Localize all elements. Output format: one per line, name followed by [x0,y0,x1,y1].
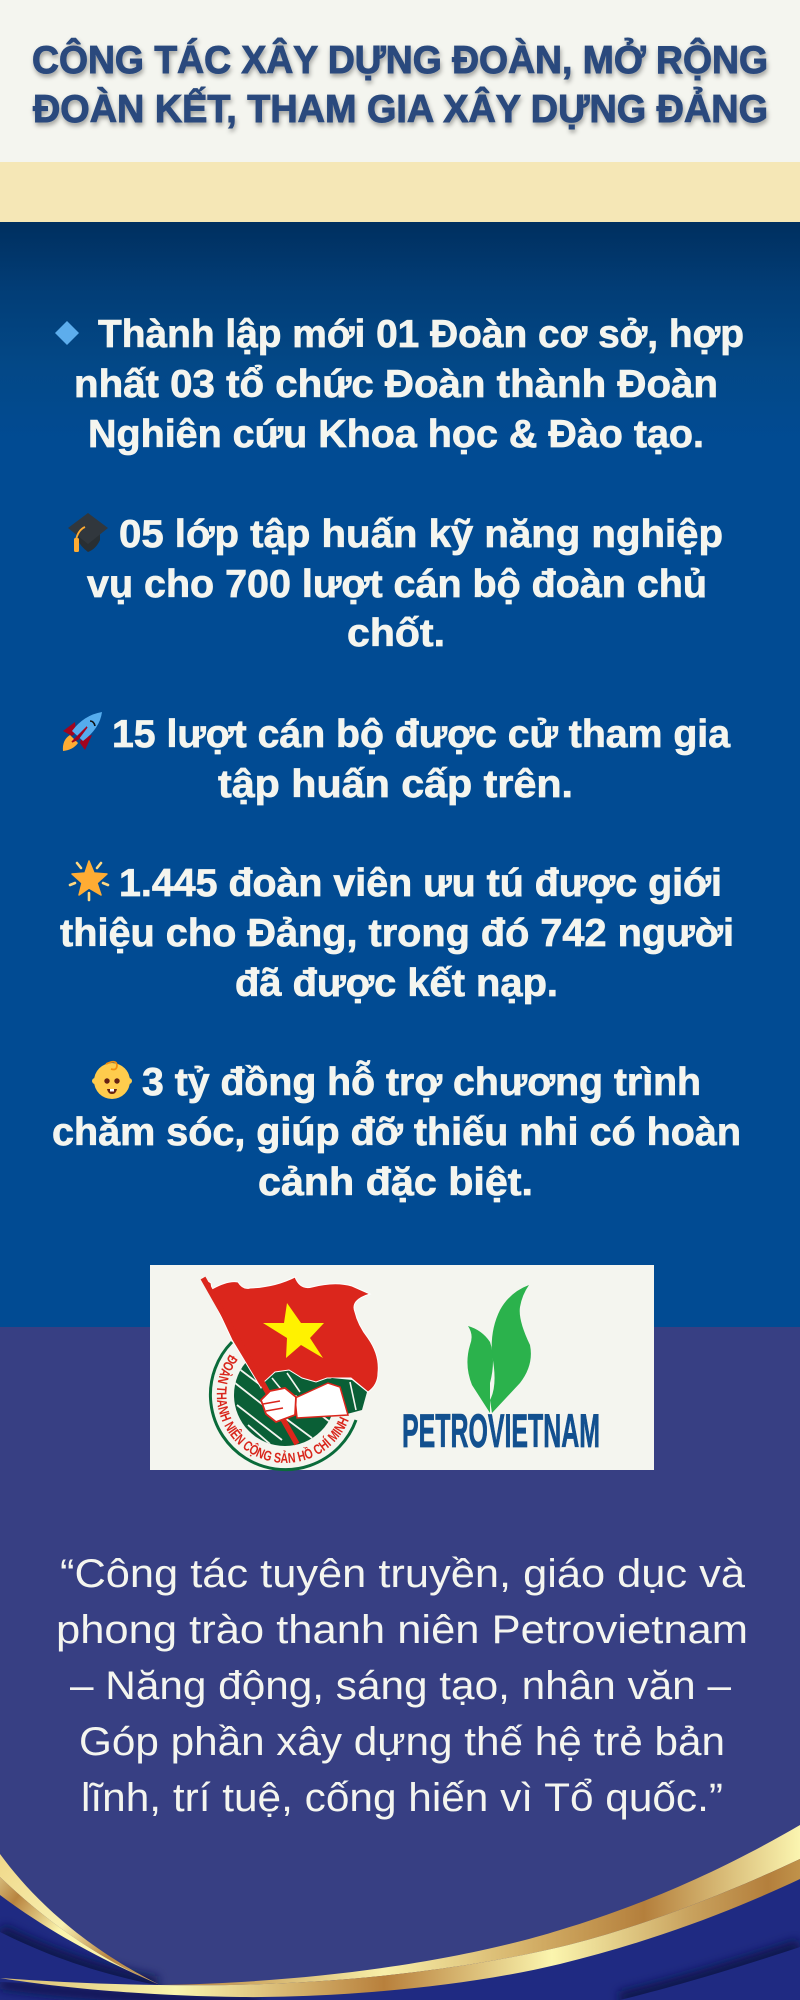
text block: new organisations: nhất 03 tổ chức Đoàn thành Đoàn [74,363,718,406]
text block: officers sent for training [63,712,731,806]
text block: new organisations [55,313,744,456]
icon: rocket [63,712,102,751]
panel: logo card [150,1265,654,1472]
text block: outstanding members [60,861,734,1005]
title: CÔNG TÁC XÂY DỰNG ĐOÀN, MỞ RỘNG [32,37,768,82]
text block: closing quote: Góp phần xây dựng thế hệ trẻ bản [79,1720,725,1764]
panel: header background [0,0,800,162]
text block: training classes: chốt. [347,612,445,655]
text block: support for children: 3 tỷ đồng hỗ trợ chương trình [142,1060,701,1104]
text block: outstanding members: đã được kết nạp. [235,962,558,1005]
icon: Ho Chi Minh Youth Union badge [200,1276,379,1472]
panel: blue achievements background [0,222,800,1327]
title: ĐOÀN KẾT, THAM GIA XÂY DỰNG ĐẢNG [33,87,768,131]
text block: training classes: vụ cho 700 lượt cán bộ đoàn chủ [87,563,707,606]
icon: Petrovietnam leaves [467,1285,531,1413]
icon: star on flag [263,1303,324,1358]
text block: closing quote: – Năng động, sáng tạo, nhân văn – [70,1664,732,1708]
icon: graduation cap [68,513,108,552]
text block: new organisations: Thành lập mới 01 Đoàn cơ sở, hợp [98,313,744,356]
icon: glowing star [70,861,108,900]
text block: officers sent for training: 15 lượt cán bộ được cử tham gia [112,713,731,756]
text block: support for children: cảnh đặc biệt. [258,1161,533,1204]
text block: training classes: 05 lớp tập huấn kỹ năng nghiệp [119,513,723,556]
icon: blue diamond [55,321,79,345]
text block: officers sent for training: tập huấn cấp trên. [218,763,573,806]
title [32,37,768,131]
panel: purple quote background [0,1327,800,2000]
text block: closing quote [56,1552,748,1820]
icon: baby face [92,1062,132,1099]
text block: closing quote: “Công tác tuyên truyền, giáo dục và [60,1552,746,1596]
Petrovietnam wordmark: PETROVIETNAM [402,1404,600,1457]
text block: training classes [68,513,723,655]
text block: support for children [52,1060,741,1204]
text block: outstanding members: thiệu cho Đảng, trong đó 742 người [60,912,734,955]
icon: Ho Chi Minh Youth Union badge: ĐOÀN THANH NIÊN CỘNG SẢN HỒ CHÍ MINH [216,1354,349,1463]
text block: support for children: chăm sóc, giúp đỡ thiếu nhi có hoàn [52,1111,741,1154]
text block: closing quote: lĩnh, trí tuệ, cống hiến vì Tổ quốc.” [81,1776,723,1820]
text block: closing quote: phong trào thanh niên Petrovietnam [56,1608,748,1652]
cream band [0,162,800,222]
text block: outstanding members: 1.445 đoàn viên ưu tú được giới [119,862,722,905]
text block: new organisations: Nghiên cứu Khoa học & Đào tạo. [88,413,704,456]
decorative gold and navy ribbons [0,1825,800,2000]
